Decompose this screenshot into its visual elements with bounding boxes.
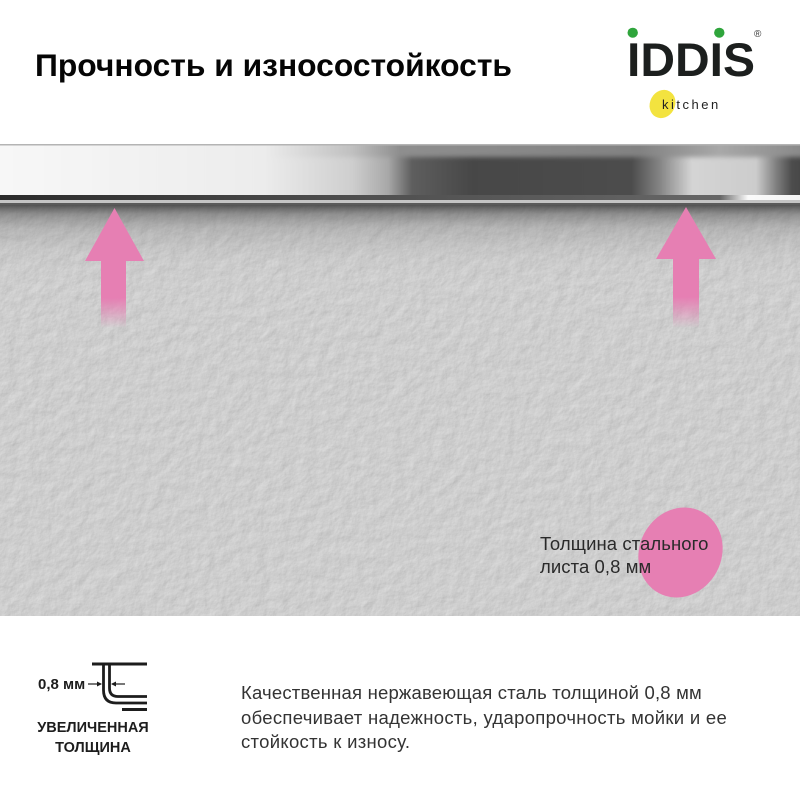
photo: steel sink edge and surface bbox=[0, 144, 800, 616]
steel rim bbox=[0, 144, 800, 205]
icon caption: УВЕЛИЧЕННАЯ bbox=[37, 720, 149, 736]
description text: Качественная нержавеющая сталь толщиной 0,8 мм bbox=[241, 682, 702, 703]
description text bbox=[241, 682, 727, 752]
registered mark: ® bbox=[754, 29, 762, 40]
title: Прочность и износостойкость bbox=[35, 47, 512, 83]
pink blob bbox=[623, 493, 738, 612]
icon caption bbox=[37, 720, 149, 756]
callout: sheet thickness: Толщина стального bbox=[540, 533, 708, 554]
yellow blob bbox=[645, 85, 680, 123]
logo: IDDIS kitchen bbox=[627, 28, 762, 118]
callout: sheet thickness: листа 0,8 мм bbox=[540, 556, 651, 576]
description text: стойкость к износу. bbox=[241, 731, 410, 752]
thickness arrows bbox=[88, 682, 125, 686]
arrow: right bbox=[656, 207, 716, 328]
arrow: left bbox=[85, 208, 144, 328]
icon label: 0,8 мм bbox=[38, 676, 85, 693]
kitchen label: kitchen bbox=[662, 97, 721, 112]
logo wordmark: IDDIS bbox=[627, 34, 755, 87]
concrete-like surface bbox=[0, 200, 800, 616]
logo dots bbox=[628, 28, 724, 38]
callout: sheet thickness bbox=[540, 533, 708, 576]
description text: обеспечивает надежность, ударопрочность мойки и ее bbox=[241, 706, 727, 728]
sink profile lines bbox=[92, 664, 147, 710]
icon: thickness diagram bbox=[38, 662, 147, 711]
icon caption: ТОЛЩИНА bbox=[55, 740, 131, 756]
